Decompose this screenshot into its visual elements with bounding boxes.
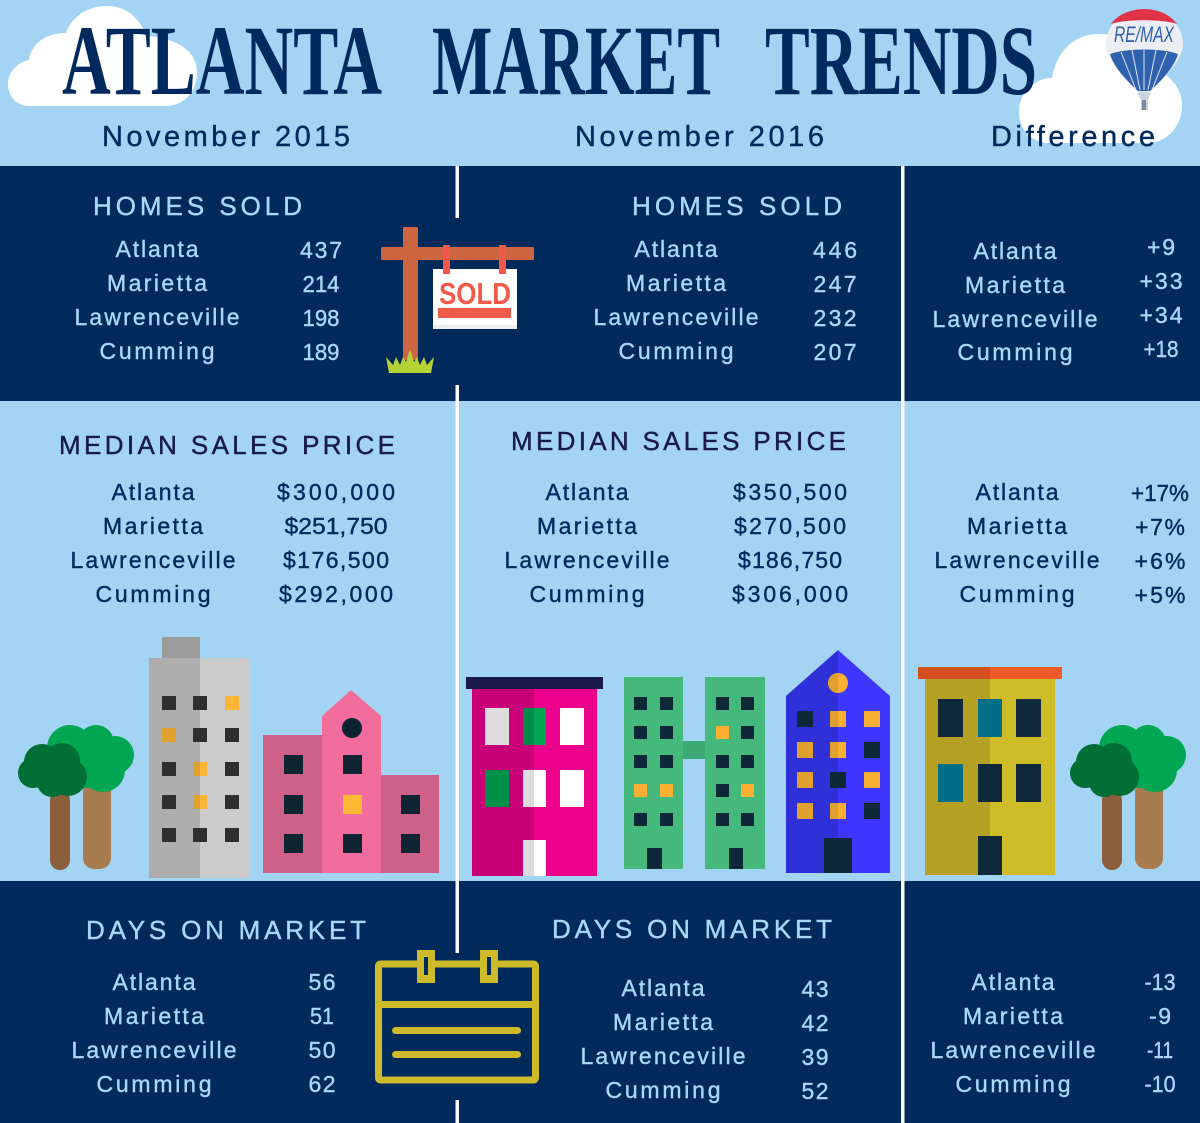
table rows: Lawrenceville	[72, 1037, 236, 1063]
table rows: Cumming	[618, 338, 734, 364]
table rows: Atlanta	[546, 479, 629, 505]
panel: homes sold 2016	[594, 191, 857, 365]
table rows: 62	[308, 1071, 336, 1097]
panel: median sales price difference: Marietta	[967, 513, 1067, 539]
panel: homes sold difference: Cumming	[958, 339, 1072, 365]
table rows: Lawrenceville	[74, 304, 240, 330]
panel: days on market difference: Lawrenceville	[930, 1037, 1096, 1063]
panel: homes sold difference: Atlanta	[974, 238, 1057, 264]
table rows: Atlanta	[116, 236, 199, 262]
table rows	[580, 975, 828, 1104]
panel: median sales price difference: +7%	[1135, 514, 1185, 540]
icon: calendar	[378, 950, 536, 1080]
panel: median sales price difference	[934, 479, 1189, 608]
panel: days on market 2015	[72, 915, 366, 1097]
table rows: Lawrenceville	[594, 304, 758, 330]
panel: median sales price difference: Atlanta	[976, 479, 1059, 505]
column heading: Difference: Difference	[991, 121, 1155, 153]
panel: homes sold difference: Marietta	[965, 272, 1065, 298]
column heading: November 2015: November 2015	[102, 121, 350, 153]
panel: homes sold difference: +34	[1140, 302, 1183, 328]
panel: median sales price difference: +17%	[1131, 480, 1189, 506]
icon: green twin towers	[624, 677, 765, 869]
heading: MEDIAN SALES PRICE	[511, 426, 846, 456]
panel: homes sold difference: +9	[1147, 234, 1175, 260]
panel: days on market difference: -10	[1144, 1071, 1176, 1097]
table rows	[70, 479, 395, 607]
panel: homes sold difference: +18	[1144, 336, 1178, 362]
panel: median sales price difference: +6%	[1134, 548, 1186, 574]
icon: pink building	[263, 690, 439, 873]
table rows: Lawrenceville	[70, 547, 236, 573]
table rows	[72, 969, 336, 1097]
table rows: Cumming	[96, 1071, 212, 1097]
icon: yellow building	[918, 667, 1062, 875]
table rows: Atlanta	[112, 479, 195, 505]
table rows: $306,000	[732, 581, 848, 607]
table rows: 42	[802, 1010, 828, 1036]
panel: homes sold difference	[932, 234, 1183, 365]
heading: HOMES SOLD	[93, 191, 302, 221]
panel: days on market 2016	[552, 914, 832, 1104]
icon: RE/MAX balloon logo: RE/MAX	[1114, 22, 1175, 47]
table rows: Atlanta	[622, 975, 705, 1001]
table rows: $350,500	[733, 479, 847, 505]
panel: homes sold 2015	[74, 191, 342, 365]
table rows: Lawrenceville	[580, 1043, 746, 1069]
table rows: Atlanta	[112, 969, 196, 995]
panel: median sales price 2015	[59, 430, 395, 607]
table rows: 437	[300, 237, 342, 263]
panel: homes sold difference: Lawrenceville	[932, 306, 1098, 332]
table rows: 43	[802, 976, 828, 1002]
title: ATLANTA	[62, 5, 382, 116]
icon: right cloud	[1019, 34, 1182, 143]
table rows: Atlanta	[634, 236, 718, 262]
table rows: 52	[802, 1078, 828, 1104]
table rows: 51	[310, 1003, 334, 1029]
panel: median sales price difference: +5%	[1134, 582, 1186, 608]
table rows: Marietta	[626, 270, 726, 296]
table rows: 198	[302, 305, 340, 331]
table rows: 207	[814, 339, 856, 365]
title: MARKET	[432, 5, 720, 116]
table rows: 39	[802, 1044, 828, 1070]
table rows: $186,750	[738, 547, 842, 573]
icon: right trees	[1070, 725, 1186, 870]
heading: HOMES SOLD	[632, 191, 842, 221]
table rows: Marietta	[104, 1003, 204, 1029]
table rows: 50	[308, 1037, 336, 1063]
table rows	[504, 479, 848, 607]
panel: median sales price 2016	[504, 426, 848, 607]
icon: left cloud	[8, 6, 197, 106]
panel: days on market difference: Cumming	[956, 1071, 1070, 1097]
heading: MEDIAN SALES PRICE	[59, 430, 395, 460]
table rows: 446	[813, 237, 857, 263]
table rows: 56	[308, 969, 336, 995]
table rows: 214	[302, 271, 340, 297]
panel: days on market difference: Atlanta	[972, 969, 1055, 995]
table rows: Cumming	[96, 581, 210, 607]
table rows: 189	[302, 339, 340, 365]
icon: grey tower	[149, 637, 250, 878]
table rows: Cumming	[606, 1077, 720, 1103]
table rows: 247	[814, 271, 856, 297]
title: TRENDS	[765, 5, 1037, 116]
panel: median sales price difference: Cumming	[960, 581, 1074, 607]
panel: days on market difference: -13	[1144, 969, 1176, 995]
table rows: 232	[814, 305, 856, 331]
table rows: Marietta	[613, 1009, 713, 1035]
icon: sold sign: SOLD	[439, 276, 511, 311]
panel: days on market difference	[930, 969, 1176, 1097]
table rows: Marietta	[103, 513, 203, 539]
table rows: $251,750	[284, 513, 388, 539]
table rows: Cumming	[100, 338, 214, 364]
panel: days on market difference: Marietta	[963, 1003, 1063, 1029]
icon: RE/MAX balloon logo	[1106, 9, 1183, 110]
table rows: Lawrenceville	[504, 547, 670, 573]
icon: magenta building	[466, 677, 603, 876]
heading: DAYS ON MARKET	[86, 915, 366, 945]
column heading: November 2016: November 2016	[575, 121, 824, 153]
title	[62, 5, 1037, 116]
panel: median sales price difference: Lawrenceville	[934, 547, 1100, 573]
panel: days on market difference: -11	[1147, 1037, 1173, 1063]
heading: DAYS ON MARKET	[552, 914, 832, 944]
icon: blue building	[786, 650, 890, 873]
icon: left trees	[18, 725, 134, 870]
icon: sold sign	[381, 227, 534, 373]
panel: homes sold difference: +33	[1140, 268, 1182, 294]
table rows: $270,500	[734, 513, 846, 539]
table rows	[74, 236, 342, 365]
table rows	[594, 236, 857, 365]
table rows: $292,000	[279, 581, 393, 607]
table rows: Cumming	[530, 581, 644, 607]
table rows: $176,500	[283, 547, 389, 573]
table rows: Marietta	[537, 513, 637, 539]
panel: days on market difference: -9	[1149, 1003, 1171, 1029]
table rows: $300,000	[277, 479, 395, 505]
table rows: Marietta	[107, 270, 207, 296]
